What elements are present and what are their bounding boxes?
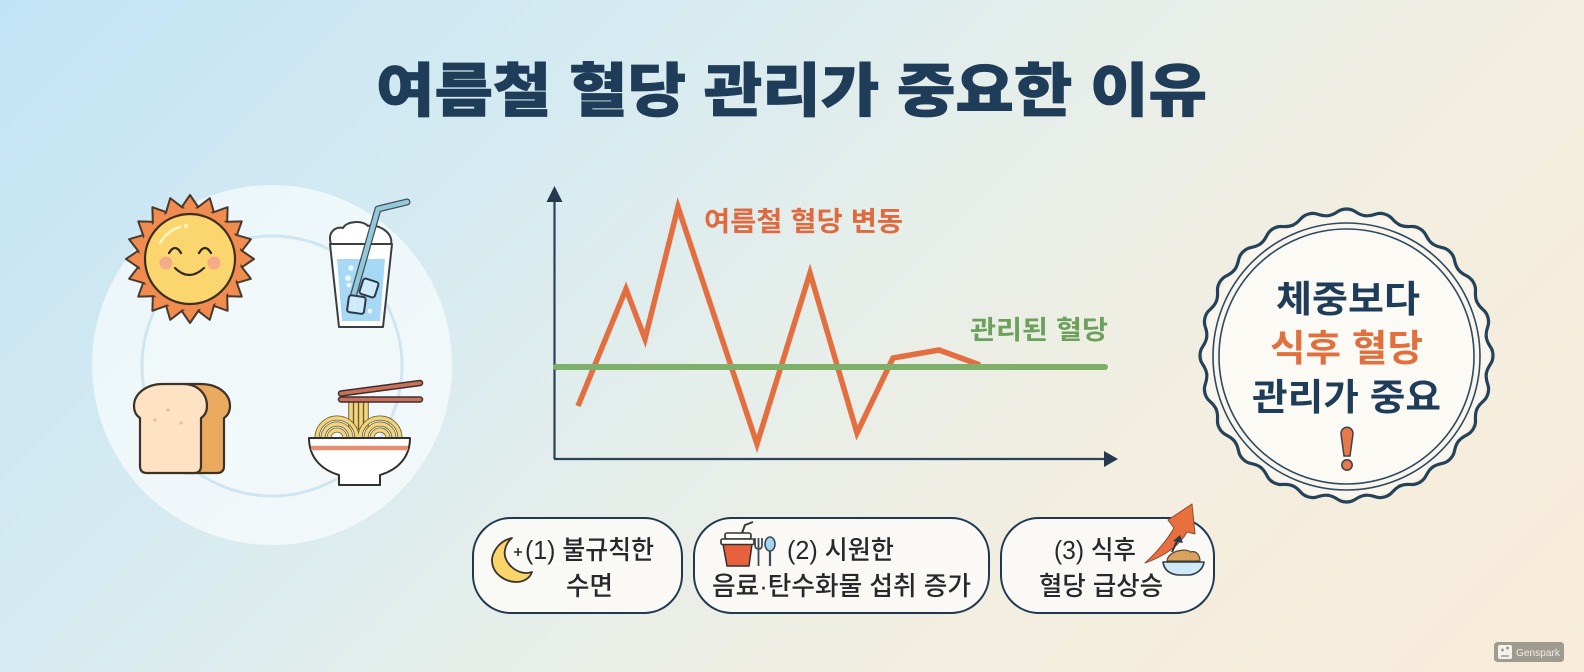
title: 여름철 혈당 관리가 중요한 이유 [376, 44, 1207, 128]
pill text: (3) 식후 [1054, 535, 1136, 565]
icon: cold cup with cutlery [721, 522, 775, 566]
pill text: (2) 시원한 [787, 535, 894, 565]
icon: rising arrow with food bowl [1145, 504, 1204, 575]
label: summer blood sugar fluctuation: 여름철 혈당 변동 [704, 200, 903, 239]
icon: iced drink [330, 202, 407, 327]
line: summer blood sugar [578, 207, 980, 444]
wavy badge border [1200, 209, 1493, 502]
badge text line 3: 관리가 중요 [1252, 367, 1441, 421]
pill text line 2: 혈당 급상승 [1039, 571, 1163, 601]
x axis arrow [554, 451, 1118, 467]
badge text line 1: 체중보다 [1276, 269, 1420, 323]
pill: cold drinks and carbs [694, 518, 989, 613]
y axis arrow [546, 186, 562, 459]
pill: post-meal spike [1001, 504, 1214, 613]
pill text line 2: 음료·탄수화물 섭취 증가 [712, 571, 971, 601]
badge text line 2: 식후 혈당 [1270, 318, 1423, 372]
watermark: Genspark: Genspark [1516, 647, 1561, 659]
icon: smiling sun [125, 194, 255, 324]
chart: blood sugar fluctuation [546, 186, 1118, 467]
icon: exclamation mark [1341, 427, 1353, 470]
panel: summer risk icons [92, 185, 452, 545]
pill: irregular sleep [473, 518, 682, 613]
pill text line 2: 수면 [566, 571, 613, 601]
pill text: (1) 불규칙한 [525, 535, 654, 565]
icon: crescent moon [492, 538, 532, 582]
line: managed blood sugar [556, 364, 1105, 370]
icon: bread loaf [134, 384, 230, 473]
icon: noodle bowl with chopsticks [309, 383, 420, 485]
badge: key message [1200, 209, 1493, 502]
watermark: Genspark [1494, 642, 1564, 662]
label: managed blood sugar: 관리된 혈당 [970, 310, 1108, 347]
